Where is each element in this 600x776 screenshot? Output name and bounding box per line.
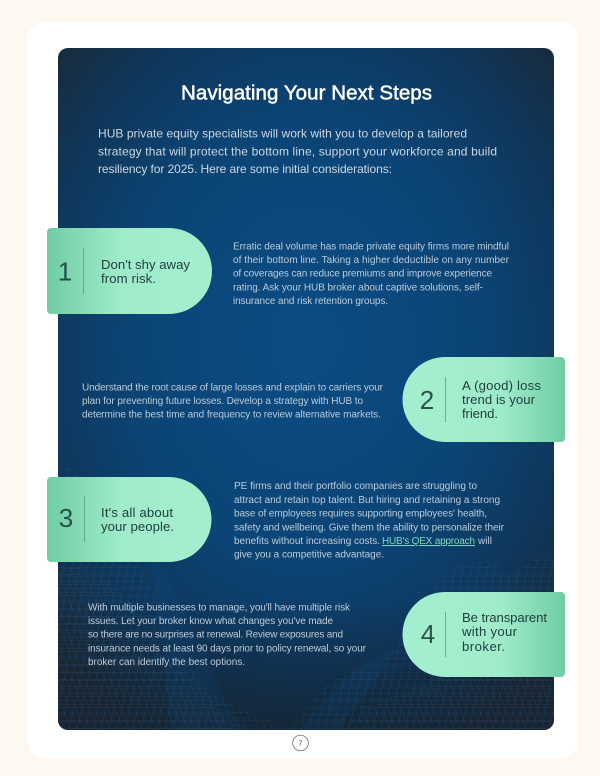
step 1 description xyxy=(233,242,510,307)
step 1 label xyxy=(101,257,190,286)
step 1 description: insurance and risk retention groups. xyxy=(233,296,388,307)
step 3 pill xyxy=(47,477,212,562)
step 4 description: insurance needs at least 90 days prior to policy renewal, so your xyxy=(88,644,367,654)
intro paragraph xyxy=(98,126,497,176)
step 4 label: Be transparent xyxy=(462,610,547,625)
intro paragraph: resiliency for 2025. Here are some initial considerations: xyxy=(98,162,392,176)
step 3 number: 3 xyxy=(59,503,73,533)
page number: 7 xyxy=(299,740,303,748)
step 1 description: Erratic deal volume has made private equity firms more mindful xyxy=(233,242,509,252)
step 3 description: safety and wellbeing. Give them the ability to personalize their xyxy=(234,522,505,534)
step 4 label xyxy=(461,610,547,654)
step 4 description: broker can identify the best options. xyxy=(88,657,245,668)
step 2 description: plan for preventing future losses. Develop a strategy with HUB to xyxy=(82,396,363,407)
step 4 description: issues. Let your broker know what changes you've made xyxy=(88,616,333,627)
QEX link: HUB's QEX approach xyxy=(382,536,475,547)
step 4 description xyxy=(88,602,367,668)
step 3 description: benefits without increasing costs. xyxy=(234,536,380,547)
step 2 label: friend. xyxy=(462,406,498,421)
panel: dark blue background xyxy=(58,48,554,730)
step 1 description: rating. Ask your HUB broker about captive solutions, self- xyxy=(233,282,483,294)
step 1 number: 1 xyxy=(58,256,72,286)
step 3 label: your people. xyxy=(101,519,174,534)
step 2 number: 2 xyxy=(420,385,434,415)
step 2 label: trend is your xyxy=(462,392,536,407)
step 1 description: of coverages can reduce premiums and improve experience xyxy=(233,268,492,280)
step 2 pill xyxy=(403,357,565,442)
step 4 description: so there are no surprises at renewal. Review exposures and xyxy=(88,630,343,640)
intro paragraph: HUB private equity specialists will work with you to develop a tailored xyxy=(98,126,467,140)
step 3 description: attract and retain top talent. But hiring and retaining a strong xyxy=(234,495,500,506)
step 4 pill xyxy=(403,592,565,677)
step 2 description xyxy=(82,382,384,420)
step 2 label: A (good) loss xyxy=(462,378,541,393)
step 2 description: Understand the root cause of large losses and explain to carriers your xyxy=(82,382,384,394)
step 3 description: give you a competitive advantage. xyxy=(234,550,384,560)
page number xyxy=(293,735,308,751)
step 4 description: With multiple businesses to manage, you'll have multiple risk xyxy=(88,602,351,614)
step 3 description xyxy=(234,481,505,560)
step 3 description: base of employees requires supporting employees' health, xyxy=(234,508,487,520)
step 3 description: PE firms and their portfolio companies are struggling to xyxy=(234,481,477,492)
step 2 label xyxy=(462,378,541,421)
step 4 label: broker. xyxy=(462,639,505,654)
step 3 label xyxy=(101,505,174,534)
step 2 description: determine the best time and frequency to review alternative markets. xyxy=(82,410,381,420)
step 3 description: will xyxy=(477,536,492,547)
step 4 label: with your xyxy=(461,624,518,639)
title: Navigating Your Next Steps xyxy=(181,82,432,104)
mesh wave pattern xyxy=(58,465,554,730)
step 3 label: It's all about xyxy=(101,505,173,520)
step 1 label: from risk. xyxy=(101,271,156,286)
intro paragraph: strategy that will protect the bottom line, support your workforce and build xyxy=(98,144,497,158)
step 1 label: Don't shy away xyxy=(101,257,190,272)
step 1 pill xyxy=(47,228,212,314)
step 4 number: 4 xyxy=(421,619,435,649)
step 1 description: of their bottom line. Taking a higher deductible on any number xyxy=(233,255,510,266)
